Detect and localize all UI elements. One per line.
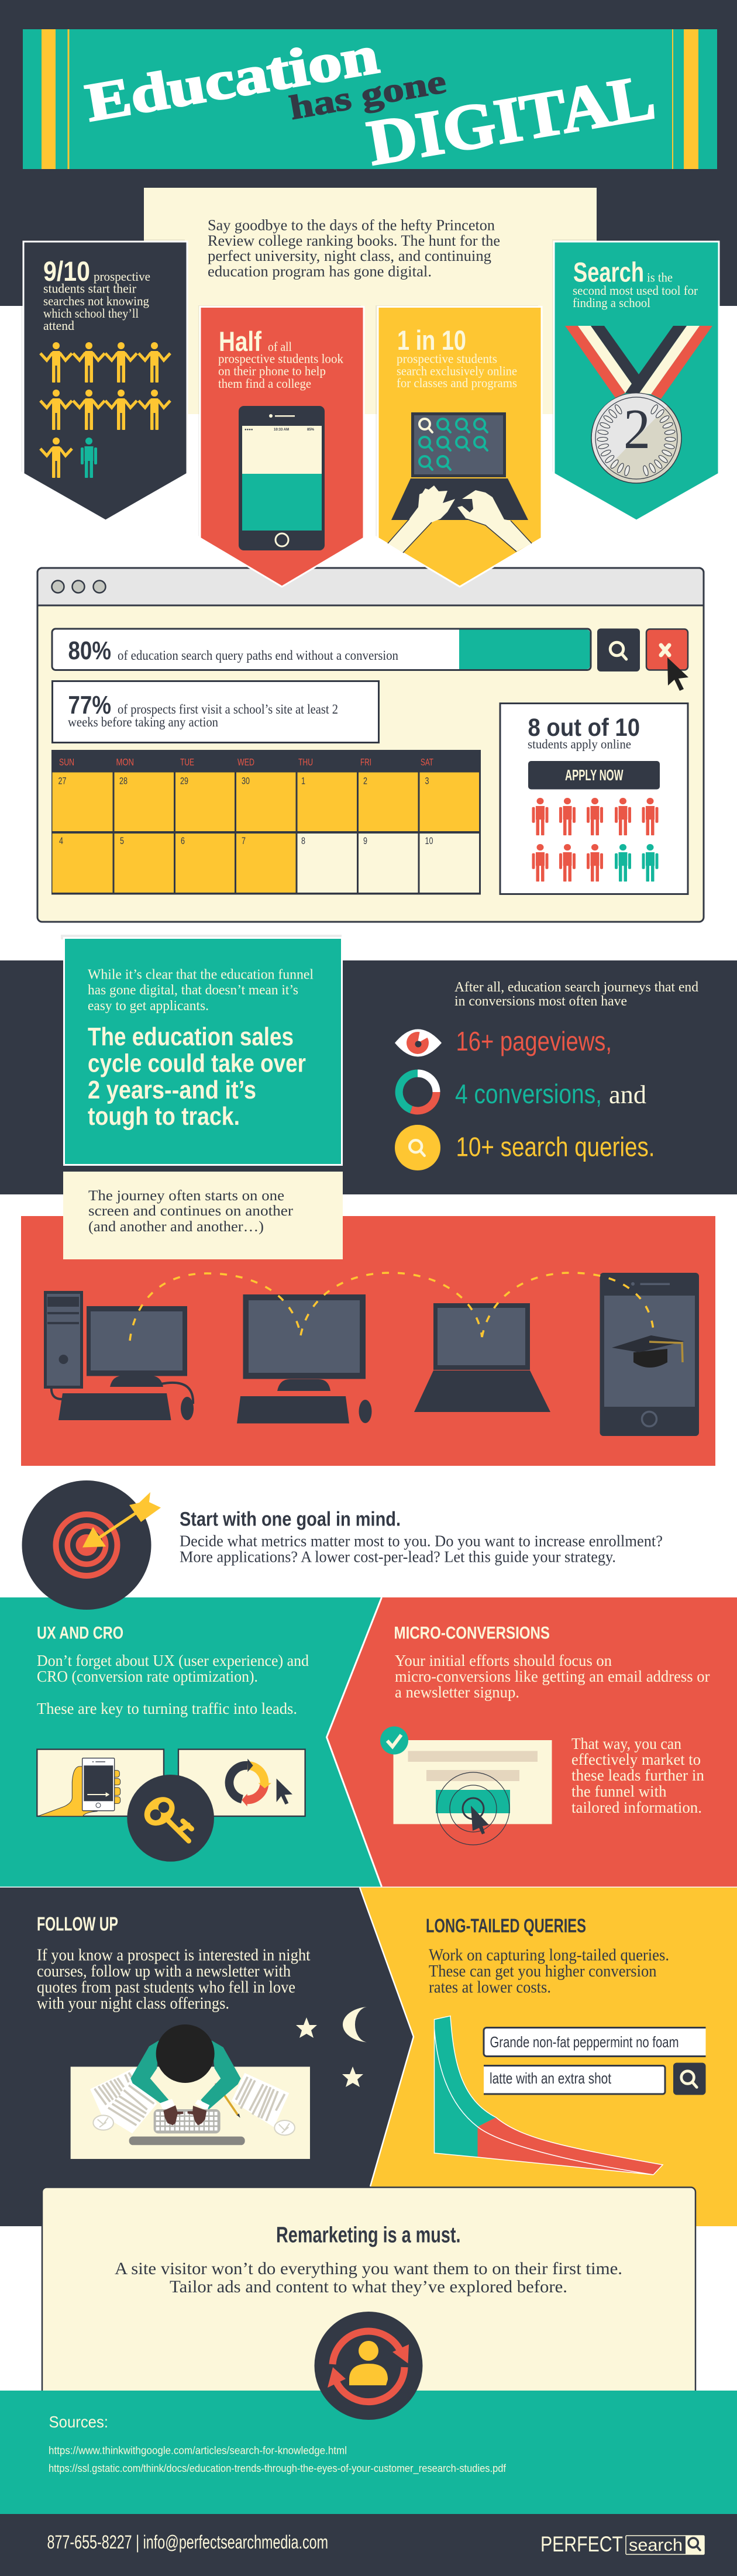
panel: journey text: The journey often starts on one [88,1188,284,1204]
heading: start with one goal: Start with one goal in mind. [180,1508,401,1530]
panel: micro-conversions: MICRO-CONVERSIONS [394,1624,550,1642]
panel: education sales cycle: tough to track. [88,1102,240,1131]
apply now button: APPLY NOW [565,766,624,784]
pencil [215,2083,240,2118]
calendar: SAT [421,757,433,767]
apply online panel: 8 out of 10 [528,714,640,742]
wrist rest [129,2137,245,2145]
stat box 77% [53,681,379,743]
arms [130,2040,241,2110]
people pictogram 9 of 10 [40,342,170,478]
panel: search journey stats: in conversions most often have [454,994,627,1009]
illustration: signup form with cursor [380,1727,552,1845]
ribbon: search second most used tool: Search [573,256,644,288]
cuffs [160,2099,209,2110]
search button [597,628,640,671]
people pictogram 8 of 10 [532,798,659,881]
close button with cursor [646,629,688,691]
search bar: grande query: Grande non-fat peppermint no foam [490,2033,679,2051]
panel: micro-conversions: micro-conversions like getting an email address or [395,1668,710,1685]
footer [0,2514,737,2576]
calendar: 27 [58,776,67,786]
papers [90,2068,289,2133]
ribbon: search second most used tool: finding a school [573,295,650,310]
stat box 77%: 77% [68,691,111,719]
panel: UX and CRO: These are key to turning traffic into leads. [37,1700,297,1717]
panel: UX and CRO: Don’t forget about UX (user experience) and [37,1652,309,1669]
search bar: latte query: latte with an extra shot [490,2069,612,2087]
red band: devices [21,1216,715,1466]
calendar: 2 [363,776,367,786]
panel: search journey stats: 16+ pageviews, [456,1026,612,1056]
dark band: journey stats [0,960,737,1194]
panel: journey text: (and another and another…) [88,1219,264,1235]
panel: follow up: with your night class offerings. [37,1995,229,2013]
intro panel: education program has gone digital. [208,263,432,280]
panel: UX and CRO [37,1624,309,1862]
search button [673,2062,705,2095]
panel: remarketing [42,2188,695,2398]
illustration: student at desk [71,2024,310,2159]
hands [163,2105,206,2125]
panel: search journey stats: 4 conversions, [455,1079,602,1109]
panel: follow up: If you know a prospect is interested in night [37,1947,311,1964]
icon: conversion ring [399,1073,436,1111]
panel: micro-conversions: these leads further in [571,1766,704,1784]
logo: perfect search: search [629,2536,683,2555]
calendar [51,750,481,895]
ribbon: half look on phone [198,305,364,587]
panel: long-tailed queries: Work on capturing long-tailed queries. [429,1947,669,1964]
ribbon: 1 in 10 search exclusively online: for classes and programs [397,376,517,390]
panel: search journey stats [395,980,698,1170]
icon: phone: ●●●● [244,428,253,432]
panel: long-tailed queries: rates at lower costs. [429,1978,551,1997]
ribbon: 9/10 prospective students [21,239,187,521]
icon: search circle [395,1125,440,1170]
panel: micro-conversions: Your initial efforts should focus on [395,1652,612,1669]
icon: target with arrow [22,1480,161,1610]
section: sources [0,2391,737,2514]
section: dark and yellow band [0,1888,737,2226]
section: sources: https://www.thinkwithgoogle.com/articles/search-for-knowledge.html [49,2445,347,2457]
intro panel [144,188,597,414]
panel: micro-conversions [380,1624,710,1845]
ribbon: 9/10 prospective students: attend [43,318,74,333]
panel: remarketing: Tailor ads and content to what they’ve explored before. [170,2277,567,2296]
panel: UX and CRO: CRO (conversion rate optimization). [37,1668,258,1685]
dashed journey arrows [130,1273,653,1341]
calendar: 4 [59,835,63,846]
panel: follow up: courses, follow up with a newsletter with [37,1962,291,1981]
heading: start with one goal: Decide what metrics matter most to you. Do you want to increase enrollment? [180,1532,663,1550]
logo: perfect search [540,2532,704,2556]
icon: desktop computer with tower [44,1291,194,1420]
section: sources: Sources: [49,2413,108,2431]
browser title bar [37,568,704,605]
heading: start with one goal [180,1508,663,1565]
panel: search journey stats: After all, education search journeys that end [454,980,698,995]
panel: follow up: FOLLOW UP [37,1913,118,1935]
apply online panel: students apply online [528,737,631,751]
panel: education sales cycle: 2 years--and it’s [88,1076,256,1104]
panel: long-tailed queries: These can get you higher conversion [429,1962,656,1981]
keyboard [154,2109,221,2133]
panel: micro-conversions: the funnel with [571,1783,667,1800]
apply now button [528,761,660,790]
ribbon: half look on phone: prospective students look [218,351,343,366]
panel: education sales cycle: The education sales [88,1022,294,1051]
panel: journey text: screen and continues on another [88,1203,294,1219]
search bar stat 80%: of education search query paths end without a conversion [118,648,398,663]
ribbon: half look on phone: them find a college [218,376,311,391]
panel: education sales cycle: has gone digital, that doesn’t mean it’s [88,983,298,998]
ribbon: 9/10 prospective students: prospective [94,269,150,284]
icon: laptop with hands [388,412,532,553]
panel: UX and CRO: UX AND CRO [37,1624,123,1642]
title banner: DIGITAL [363,61,660,179]
icon: moon and stars [296,2007,367,2087]
calendar: 8 [301,835,305,846]
heading: start with one goal: More applications? A lower cost-per-lead? Let this guide your strategy. [180,1548,616,1565]
box: phone in hand [37,1750,164,1816]
chart: long tail curve [434,2016,663,2175]
box: conversion ring and cursor [178,1750,305,1816]
icon: second desktop [237,1294,372,1424]
calendar: 29 [180,776,188,786]
ribbon: half look on phone: of all [268,339,292,354]
calendar: 5 [120,835,124,846]
icon: eye [395,1029,442,1056]
ribbon: 9/10 prospective students: which school they’ll [43,306,139,321]
icon: phone [239,406,325,550]
calendar: SUN [59,757,74,767]
icon: medal: 2 [624,398,650,460]
calendar: 10 [425,835,433,846]
icon: check badge [380,1727,408,1755]
icon: remarketing person with arrows [315,2312,422,2420]
search bar: grande query [484,2027,705,2057]
devices illustration [44,1273,699,1436]
panel: micro-conversions: That way, you can [571,1735,681,1752]
ribbon: search second most used tool [552,239,719,521]
footer: 877-655-8227 | info@perfectsearchmedia.com [47,2532,328,2553]
intro panel: Say goodbye to the days of the hefty Princeton [208,216,495,234]
ribbon: half look on phone: on their phone to help [218,364,326,378]
ribbon: 9/10 prospective students: searches not knowing [43,294,149,308]
title banner: has gone [287,62,449,127]
panel: education sales cycle: While it’s clear that the education funnel [88,967,314,983]
title banner: Education [81,25,383,133]
ribbon: 1 in 10 search exclusively online: prospective students [397,351,497,366]
panel: micro-conversions: tailored information. [571,1799,702,1816]
ribbon: half look on phone: Half [219,326,261,357]
ribbon: 9/10 prospective students: students start their [43,281,137,296]
calendar: 3 [425,776,429,786]
calendar: 1 [301,776,305,786]
panel: remarketing: Remarketing is a must. [276,2223,461,2247]
header background [0,0,737,306]
panel: micro-conversions: effectively market to [571,1751,701,1768]
panel: micro-conversions: a newsletter signup. [395,1683,519,1701]
panel: long-tailed queries: LONG-TAILED QUERIES [426,1915,586,1936]
intro panel: Review college ranking books. The hunt for the [208,232,500,249]
apply online panel [500,703,688,894]
calendar: 28 [119,776,128,786]
panel: search journey stats: and [609,1080,646,1109]
icon: phone: 85% [307,428,315,432]
icon: laptop [414,1303,550,1412]
panel: education sales cycle: easy to get applicants. [88,998,209,1014]
panel: search journey stats: 10+ search queries. [456,1131,655,1162]
logo: perfect search: PERFECT [540,2532,623,2556]
icon: phone: 10:33 AM [274,428,289,432]
calendar: TUE [180,757,194,767]
ribbon: 1 in 10 search exclusively online [376,305,542,587]
head [156,2024,215,2083]
calendar: 9 [363,835,367,846]
calendar: 30 [242,776,250,786]
calendar: FRI [360,757,371,767]
calendar: WED [237,757,254,767]
panel: follow up [37,1913,367,2159]
calendar: THU [298,757,313,767]
ribbon: 9/10 prospective students: 9/10 [43,256,90,287]
calendar: 7 [242,835,246,846]
icon: phone with graduation cap [600,1273,699,1436]
crumpled paper [93,2115,295,2135]
calendar: MON [116,757,134,767]
search bar stat 80%: 80% [68,636,111,665]
panel: follow up: quotes from past students who fell in love [37,1978,295,1997]
ribbon: search second most used tool: is the [647,270,673,284]
stat box 77%: of prospects first visit a school’s site at least 2 [118,702,338,717]
section: teal and red strategy band [0,1596,737,1888]
title banner [23,25,717,179]
panel: journey text [63,1172,343,1259]
panel: education sales cycle: cycle could take over [88,1049,306,1077]
ribbon: 1 in 10 search exclusively online: search exclusively online [397,364,517,378]
calendar: 6 [181,835,185,846]
panel: long-tailed queries [426,1915,705,2175]
ribbon: search second most used tool: second most used tool for [573,283,698,298]
panel: remarketing: A site visitor won’t do everything you want them to on their first time. [115,2259,622,2278]
icon: medal [565,326,712,483]
section: sources: https://ssl.gstatic.com/think/docs/education-trends-through-the-eyes-of-your-customer_research-studies.pdf [49,2463,507,2475]
panel: education sales cycle [61,935,342,1165]
illustration: phone hand, conversion ring, key [37,1750,305,1862]
icon: key [127,1775,214,1862]
stat box 77%: weeks before taking any action [68,715,218,729]
intro panel: perfect university, night class, and continuing [208,247,491,264]
search bar stat 80% [52,629,591,670]
ribbon: 1 in 10 search exclusively online: 1 in 10 [397,325,466,356]
search bar: latte query [484,2066,665,2094]
